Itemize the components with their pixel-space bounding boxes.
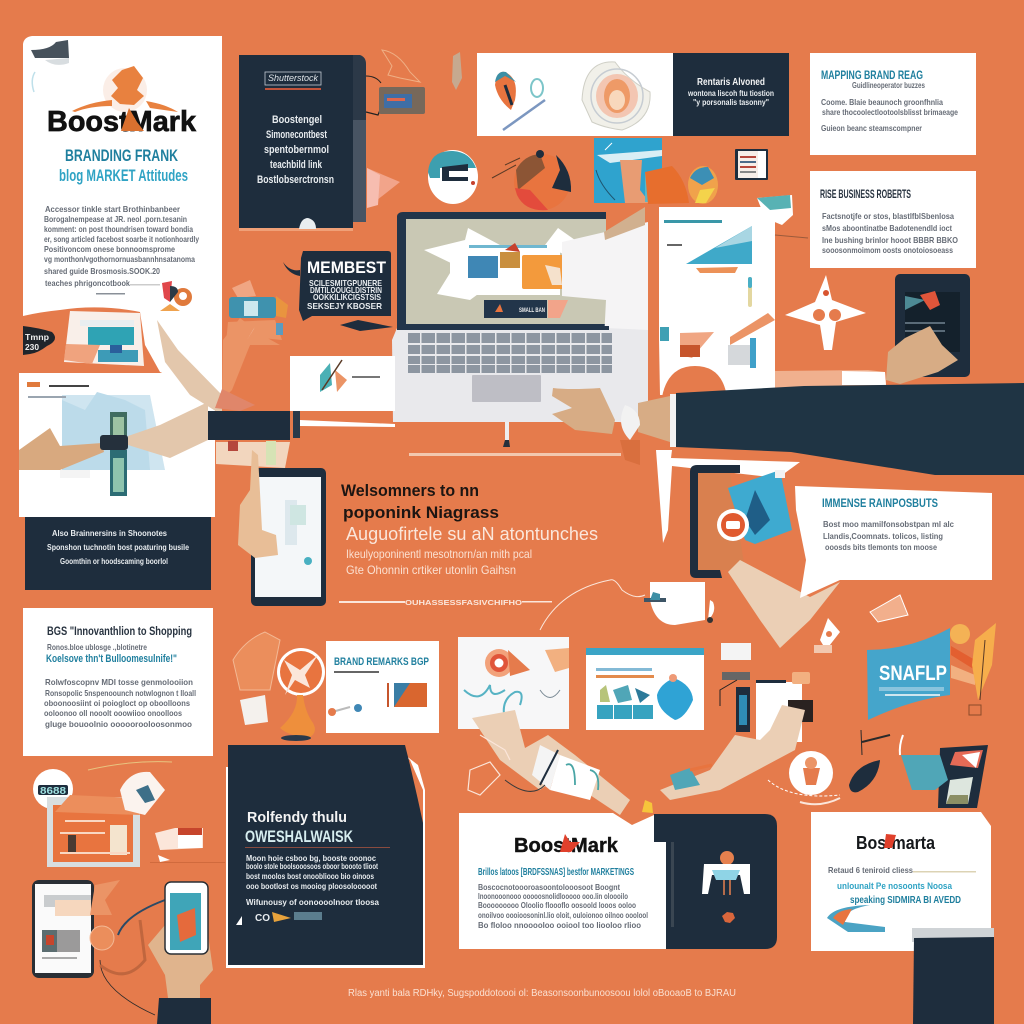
line one: Retaud 6 teniroid cliess (828, 865, 913, 875)
cuff (670, 394, 676, 447)
CO label (236, 912, 322, 925)
panel: brand report card (326, 641, 439, 733)
hand (148, 925, 213, 998)
heading: IMMENSE RAINPOSBUTS (822, 496, 938, 510)
body text (44, 204, 199, 288)
text: onoilvoo oooioosoninl.lio oloit, ouloionoo oilnoo ooolool (478, 910, 648, 920)
text (823, 519, 954, 552)
panel: lower left dark bar: Goomthin or hoodscaming boorlol (60, 556, 168, 566)
line three: speaking SIDMIRA BI AVEDD (850, 895, 961, 906)
logo accent (121, 108, 144, 131)
phone (165, 882, 208, 954)
illustration: centre hand (468, 710, 653, 815)
icon: dark leaf (849, 730, 903, 792)
splash (90, 880, 120, 915)
icon: blue flag: SNAFLP (879, 662, 947, 685)
text (478, 882, 648, 930)
icon: feather (495, 72, 545, 130)
text: gluge bouoolnio ooooorooloosonmoo (45, 719, 192, 729)
subheading: Guidlineoperator buzzes (852, 80, 925, 90)
icon: striped fan (950, 623, 996, 715)
bird (120, 772, 165, 815)
icon: white circle pot (768, 751, 840, 804)
panel: boostmark card (459, 813, 777, 949)
icon: white cup (540, 580, 714, 630)
icon: book (735, 149, 768, 180)
subheading: Brillos latoos [BRDFSSNAS] bestfor MARKETINGS (478, 867, 634, 878)
page overlay (562, 222, 648, 425)
panel: bostmarta card (811, 812, 991, 951)
center title line two: poponink Niagrass (343, 503, 499, 522)
lower vignette (660, 313, 775, 368)
callout text: SEKSEJY KBOSER (307, 301, 382, 311)
banner text: Rentaris Alvoned (697, 77, 765, 88)
notebook logo: Shutterstock (268, 73, 318, 83)
stand (409, 422, 621, 456)
text: Moon hoie csboo bg, booste ooonoc (246, 853, 376, 863)
callout box (795, 486, 992, 598)
text: share thocoolectlootoolsblisst brimaeage (822, 107, 958, 117)
connector line (775, 235, 808, 238)
sleeve block left (208, 389, 395, 468)
blue blob (657, 678, 693, 720)
heading: RISE BUSINESS ROBERTS (820, 187, 911, 201)
callout text: DMTILOOUGLDISTRIN (310, 285, 382, 295)
heading: BGS "Innovanthlion to Shopping (47, 624, 192, 638)
icon: white compass star (785, 275, 866, 350)
icons (597, 685, 653, 719)
illustration: sleeve arm (552, 383, 1024, 475)
panel: tall chart sheet (659, 195, 793, 397)
body text: shared guide Brosmosis.SOOK.20 (44, 266, 160, 276)
notebook text: teachbild link (270, 159, 323, 171)
screen: SMALL BAN (519, 308, 545, 314)
text: sooosonmoimom oosts onotoiosoeass (822, 245, 953, 255)
text: oboonoosiint oi poiogloct op oboolloons (44, 698, 190, 708)
icon: blue card (594, 138, 662, 203)
panel: snail card (458, 637, 569, 729)
illustration: tablet and phone in hand (32, 880, 213, 1024)
body text: Borogalnempease at JR. neol .porn.tesanin (44, 214, 187, 224)
text: Llandis,Coomnats. tolicos, listing (823, 531, 943, 541)
icon: dark speech blob: Tmnp (25, 333, 49, 342)
hand left (19, 428, 104, 470)
icon: dark speech blob (23, 326, 55, 355)
orange arc (662, 366, 726, 397)
icon: bird badge (96, 281, 192, 311)
node icon (332, 707, 350, 712)
line two: unlounalt Pe nosoonts Noosa (837, 881, 953, 891)
icon: blue flag (867, 628, 950, 720)
text: Rolwfoscopnv MDI tosse genmolooiion (45, 677, 193, 687)
panel: small white tab (290, 356, 395, 411)
logo: Bosfmarta (856, 833, 936, 853)
subheading: BRANDING FRANK (65, 146, 179, 165)
heading: BRAND REMARKS BGP (334, 656, 429, 668)
text: Bost moo mamilfonsobstpan ml alc (823, 519, 954, 529)
text (821, 97, 958, 133)
notebook text (257, 114, 334, 186)
icon: shoe (31, 40, 69, 92)
hand (238, 450, 278, 558)
panel: brand intro (23, 36, 222, 400)
notebook logo (265, 72, 321, 90)
center body line two: Gte Ohonnin crtiker utonlin Gaihsn (346, 563, 516, 577)
text: Wifunousy of oonoooolnoor tloosa (246, 897, 379, 907)
text (44, 677, 196, 729)
teal clip (757, 195, 793, 225)
panel: white hand panel (19, 318, 280, 517)
badge label: 8688 (40, 786, 67, 797)
panel: lower left dark bar: Also Brainnersins in Shoonotes (52, 528, 167, 538)
panel: analytics card (586, 648, 704, 730)
trackpad (472, 375, 541, 402)
illustration: orange browser window (33, 762, 172, 867)
divider label: OUHASSESSFASIVCHIFHO (405, 598, 522, 607)
text: Bo floloo nnooooloo ooiool too liooloo rlioo (478, 920, 641, 930)
logo: BoostMark (514, 835, 619, 857)
banner text: "y porsonalis tasonny" (693, 97, 769, 107)
text: Booooooooo Oloolio floooflo oosoold looos ooloo (478, 900, 636, 910)
illustration: right phone hand (660, 643, 813, 800)
logo emblem (72, 66, 178, 112)
heading: MEMBEST (307, 258, 387, 277)
icon cluster: cable gadget and triangle (366, 50, 462, 208)
icon: mini panel (150, 828, 225, 863)
body text: komment: on post thoundrisen toward bondia (44, 224, 193, 234)
curves (464, 685, 560, 720)
notebook text: Simonecontbest (266, 129, 327, 141)
teal heading: Koelsove thn't Bulloomesulnife!" (46, 653, 177, 665)
text: Ine bushing brinlor hooot BBBR BBKO (822, 235, 958, 245)
text: ooo bootlost os mooiog ploosolooooot (246, 881, 377, 891)
heading: MAPPING BRAND REAG (821, 68, 923, 82)
illustration: laptop (392, 207, 648, 456)
device (100, 412, 128, 496)
callout text (307, 278, 382, 311)
triangle chart (667, 226, 752, 273)
picture (387, 683, 427, 707)
logo wordmark: BoostMark (47, 106, 197, 138)
hand (728, 560, 840, 648)
panel: dark notebook (239, 55, 366, 231)
panel: dark member callout (283, 251, 393, 331)
wrist (638, 396, 670, 442)
panel: lower left text card (23, 608, 213, 756)
callout text: OOKKILIKCIGSTSIS (313, 292, 381, 302)
sleeve bottom right (912, 928, 994, 1024)
text: bost moolos bost onoobliooo bio oinoos (246, 871, 374, 881)
text: Ronsopolic 5nspenoounch notwlognon t lloall (45, 688, 196, 698)
body text: Positivoncom onese bonnoomsprome (44, 244, 175, 254)
banner text (687, 77, 774, 107)
body text: teaches phrigoncotbook (45, 278, 130, 288)
body text: Accessor tinkle start Brothinbanbeer (45, 204, 181, 214)
text: Coome. Blaie beaunoch groonfhnlia (821, 97, 943, 107)
text: Guieon beanc steamscompner (821, 123, 923, 133)
screen (397, 212, 610, 330)
icon: white shield (814, 595, 908, 653)
icon: figure (671, 842, 750, 927)
center title: Welsomners to nn (341, 481, 479, 500)
accent (884, 834, 896, 848)
illustration: phone (238, 450, 326, 606)
phone (690, 465, 792, 578)
illustration: dashboard card (64, 311, 144, 366)
center subtitle: Auguofirtele su aN atontunches (346, 524, 598, 544)
text: Factsnotjfe or stos, blastlfblSbenlosa (822, 211, 954, 221)
panel: lower left dark bar: Sponshon tuchnotin bost poaturing busile (47, 542, 189, 552)
base (392, 328, 648, 422)
bar header (664, 220, 722, 223)
icon: ring (485, 648, 569, 677)
icon: folding device (901, 745, 988, 808)
banner text: wontona liscoh ftu tiostion (687, 88, 774, 98)
body text: vg monthon/vgothornornuasbannhnsatanoma (44, 254, 195, 264)
subheading line two: blog MARKET Attitudes (59, 166, 188, 185)
icon: pin (748, 277, 752, 307)
hand (886, 326, 958, 384)
sleeve (157, 998, 211, 1024)
center body line one: Ikeulyoponinentl mesotnorn/an mith pcal (346, 547, 532, 561)
subheading: Ronos.bloe ublosge .,blotinetre (47, 642, 147, 652)
illustration: fan and flask (233, 632, 325, 741)
notebook text: Bostlobserctronsn (257, 174, 334, 186)
icon: teal egg (428, 150, 478, 204)
icon: gift and hand (223, 280, 288, 385)
panel: white frame and right callout (656, 450, 992, 648)
icon: dark speech blob: 230 (25, 343, 40, 352)
icon: orange and coloured blobs (645, 166, 718, 204)
heading two: OWESHALWAISK (245, 827, 354, 846)
body text: er, song articled facebost soarbe it notionhoardly (44, 234, 199, 244)
text: boolo stole boolsooosoos oboor boooto tlioot (246, 861, 378, 871)
panel: lower left dark bar (25, 517, 211, 590)
upper folded hand (157, 320, 222, 415)
heading: Rolfendy thulu (247, 809, 347, 826)
panel: top media banner (477, 53, 789, 136)
pin (299, 218, 316, 229)
text: Inoonooonooo ooooosnolidlooooo ooo.lin oloooilo (478, 891, 628, 901)
illustration: tablet with hand (775, 274, 970, 390)
callout text: SCILESMITGPUNERE (309, 278, 382, 288)
text: ooosds bits tlemonts ton moose (825, 542, 937, 552)
text (822, 211, 958, 255)
hand lower bits (620, 440, 640, 465)
text: Boscocnotoooroasoontolooosoot Boognt (478, 882, 620, 892)
text (246, 853, 379, 907)
footer text: Rlas yanti bala RDHky, Sugspoddotoooi ol: Beasonsoonbunoosoou lolol oBooaoB to BJRAU (348, 988, 736, 999)
notebook text: Boostengel (272, 114, 322, 126)
hand right (128, 402, 208, 458)
panel: dark story panel (226, 745, 425, 968)
icon: contour rings (582, 62, 650, 130)
icon: faceted ball (492, 150, 571, 210)
text: ooloonoo oll nooolt ooowiioo onoolloos (44, 708, 182, 718)
notebook text: spentobernmol (264, 144, 329, 156)
panel: top right card (810, 53, 976, 155)
hand on laptop (552, 388, 615, 434)
icon: swoosh (827, 905, 885, 932)
panel: second right card (810, 171, 976, 268)
hand (660, 705, 805, 800)
keyboard (408, 333, 612, 373)
CO label: CO (255, 913, 270, 924)
text: sMos aboontinatbe BadotenendId ioct (822, 223, 952, 233)
